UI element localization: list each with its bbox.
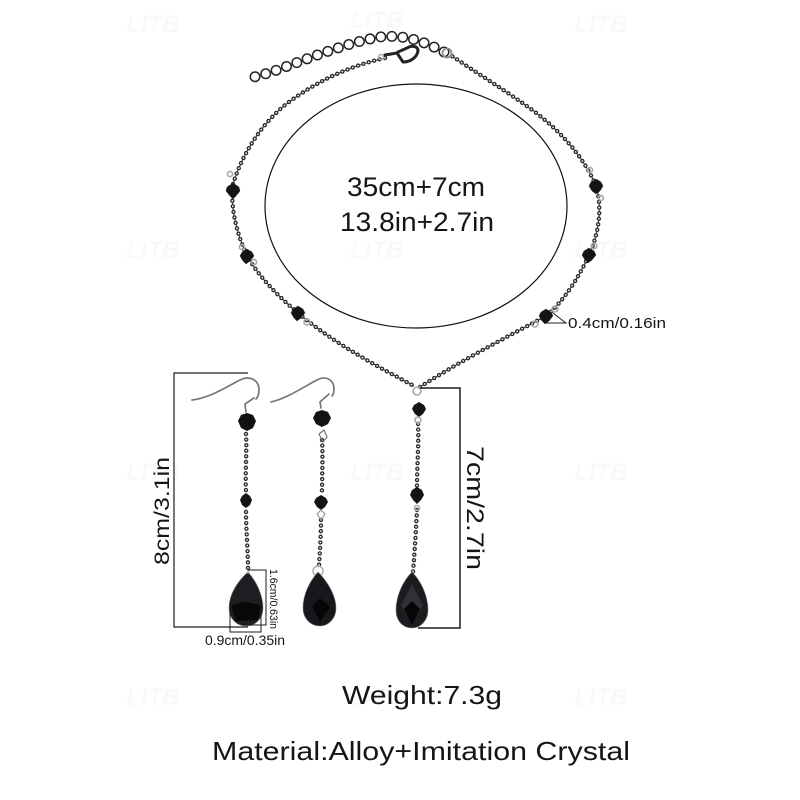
Y-drop pendant	[396, 387, 428, 628]
right chain	[420, 56, 599, 387]
necklace length label: 35cm+7cm	[347, 172, 485, 202]
earring left	[192, 378, 263, 626]
drop width bracket and label: 0.9cm/0.35in	[205, 632, 285, 648]
necklace length ellipse	[265, 84, 567, 328]
earring length label: 8cm/3.1in	[151, 457, 174, 565]
pendant length label: 7cm/2.7in	[461, 446, 488, 570]
earring length bracket	[174, 373, 248, 627]
drop height bracket and label	[245, 569, 279, 629]
material label: Material:Alloy+Imitation Crystal	[212, 736, 630, 766]
bead size callout: 0.4cm/0.16in	[568, 315, 666, 332]
left chain	[232, 58, 414, 386]
silver connector rings	[227, 167, 603, 327]
necklace beads	[226, 179, 603, 324]
faint LITB watermarks	[126, 7, 627, 711]
drop width bracket and label	[205, 605, 285, 648]
extender chain	[250, 36, 444, 78]
necklace length label: 13.8in+2.7in	[340, 207, 494, 237]
connector ring	[442, 48, 452, 58]
pendant length bracket	[418, 388, 460, 628]
drop height bracket and label: 1.6cm/0.63in	[267, 569, 279, 629]
necklace with beads and clasp	[226, 36, 603, 387]
bead size callout	[546, 313, 666, 332]
necklace length label	[340, 172, 494, 237]
weight label: Weight:7.3g	[342, 680, 502, 710]
lobster clasp	[378, 46, 418, 62]
earring right	[271, 378, 336, 626]
